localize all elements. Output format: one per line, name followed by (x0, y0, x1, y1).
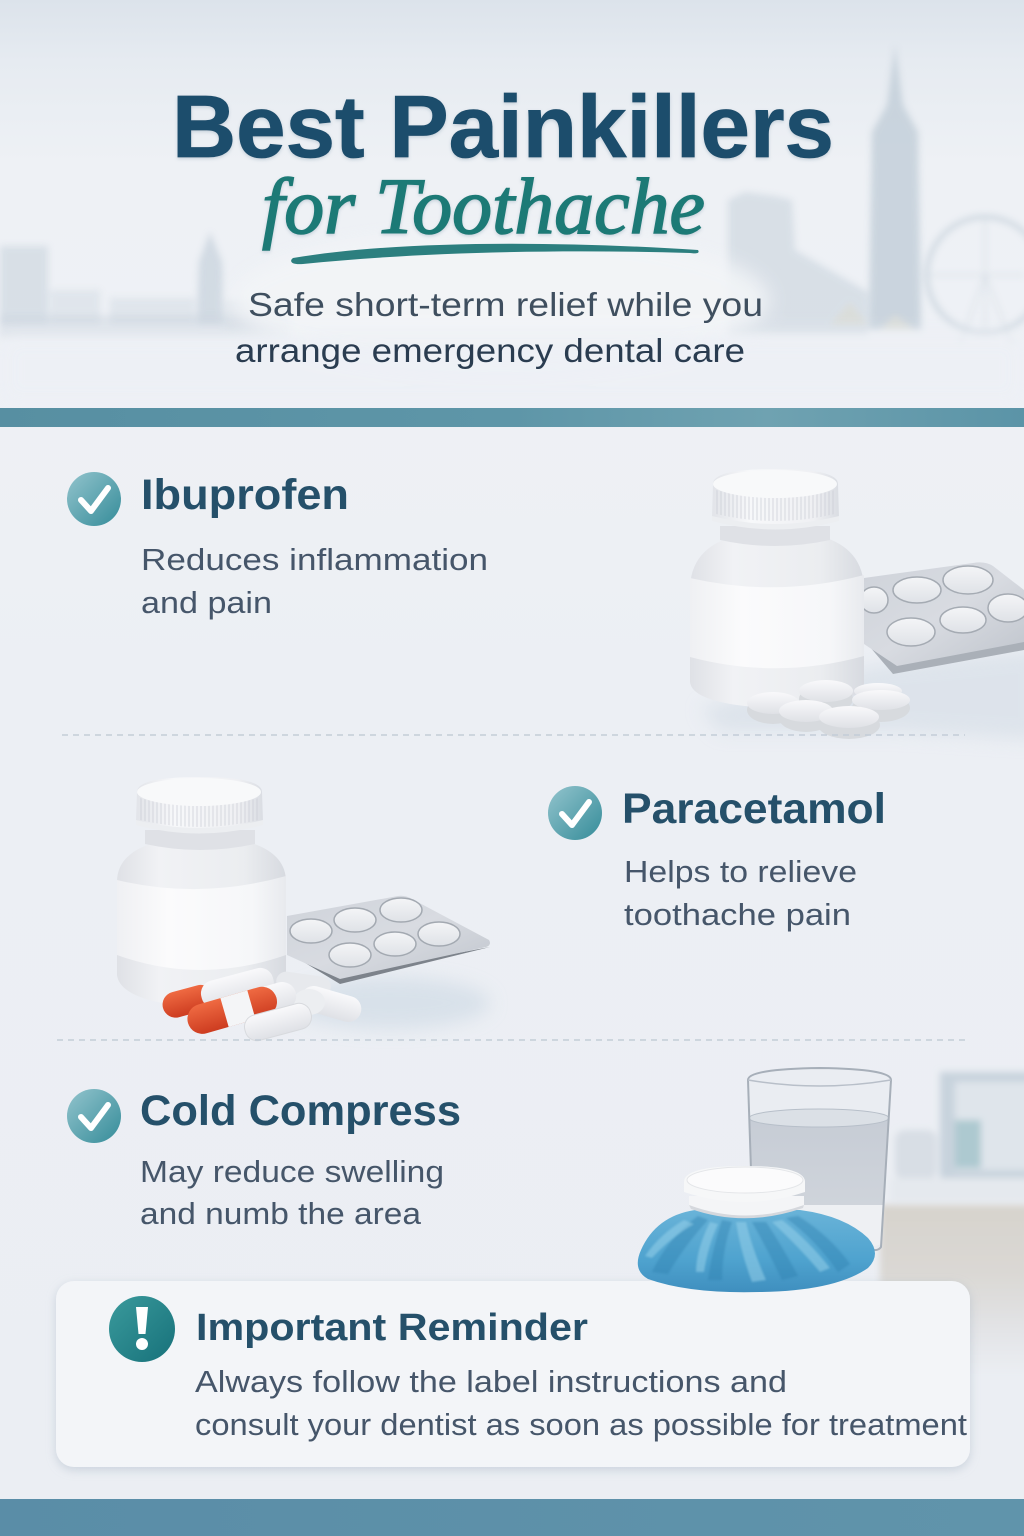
description: Ibuprofen (141, 542, 488, 620)
description: Cold Compress (140, 1154, 444, 1231)
divider (57, 1039, 965, 1041)
description: Paracetamol: Helps to relieve (624, 854, 857, 889)
soft floor shadow (290, 977, 490, 1029)
ice bag cap (684, 1166, 805, 1218)
bottom band (0, 1499, 1024, 1536)
illustration: white pill bottle, blister pack and tablets (690, 469, 1024, 740)
loose tablets (747, 680, 910, 739)
illustration: pill bottle, blister pack and capsules (117, 777, 490, 1043)
reminder text: Always follow the label instructions and (195, 1364, 787, 1399)
divider (62, 734, 965, 736)
background: low mist above the band (0, 335, 1024, 405)
description: Ibuprofen: and pain (141, 585, 272, 620)
section: Ibuprofen text (67, 471, 488, 620)
tagline: arrange emergency dental care (235, 332, 745, 369)
reminder text (195, 1364, 967, 1442)
description: Paracetamol (624, 854, 857, 932)
ice bag (638, 1210, 875, 1292)
heading: Ibuprofen: Ibuprofen (141, 471, 349, 519)
description: Cold Compress: May reduce swelling (140, 1154, 444, 1189)
callout: important reminder panel (56, 1281, 970, 1467)
icon: check badge (67, 472, 121, 526)
icon: exclamation badge (109, 1296, 175, 1362)
heading: Cold Compress: Cold Compress (140, 1087, 461, 1135)
description: Paracetamol: toothache pain (624, 897, 851, 932)
description: Ibuprofen: Reduces inflammation (141, 542, 488, 577)
blister pack (860, 562, 1024, 674)
background: blurred room and monitor, bottom right (880, 1072, 1024, 1375)
icon: check badge (67, 1089, 121, 1143)
heading: Important Reminder: Important Reminder (196, 1307, 588, 1349)
background: central light haze behind the title (230, 230, 770, 370)
tagline: Safe short-term relief while you (248, 286, 763, 323)
title: Best Painkillers: Best Painkillers (172, 77, 834, 176)
bottle (117, 777, 286, 1007)
reminder text: consult your dentist as soon as possible for treatment (195, 1407, 967, 1442)
glass of water (748, 1068, 891, 1250)
tagline (235, 286, 763, 369)
blister pack (287, 896, 490, 984)
heading: Paracetamol: Paracetamol (622, 785, 886, 833)
illustration: glass of water and blue ice pack (638, 1068, 891, 1292)
soft floor shadow (700, 650, 1024, 740)
description: Cold Compress: and numb the area (140, 1196, 422, 1231)
teal divider band (0, 408, 1024, 427)
capsules and tablets (159, 965, 364, 1043)
section: Paracetamol text (548, 785, 886, 932)
brush underline (291, 244, 699, 264)
section: Cold Compress text (67, 1087, 461, 1231)
bottle (690, 469, 864, 708)
background: misty London skyline (0, 45, 1024, 345)
icon: check badge (548, 786, 602, 840)
subtitle: for Toothache: for Toothache (262, 164, 705, 251)
